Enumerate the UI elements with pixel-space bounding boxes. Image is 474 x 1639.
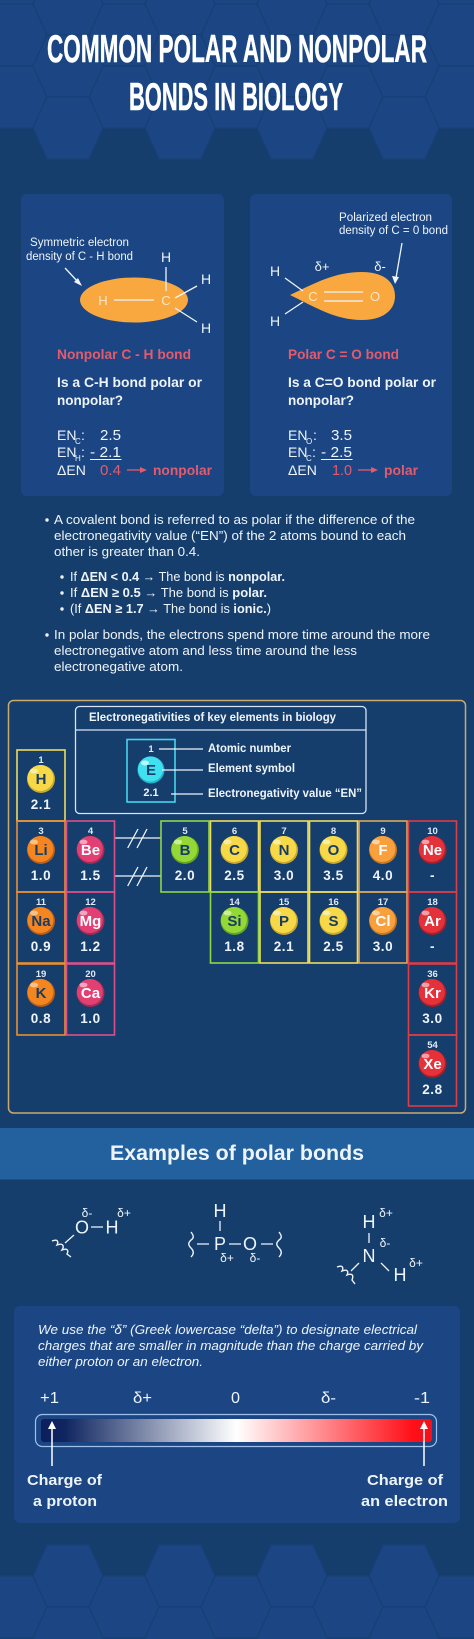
section banner: examples of polar bonds: Examples of polar bonds	[110, 1142, 364, 1165]
element: P: 2.1	[274, 939, 294, 954]
heading: nonpolar C-H bond: Nonpolar C - H bond	[57, 346, 191, 362]
molecule: N-H bonds: δ+	[379, 1206, 393, 1220]
element: Cl: 17	[378, 897, 388, 908]
element: Be	[66, 821, 114, 892]
element: P: P	[279, 913, 289, 930]
label: charge of an electron: Charge of	[367, 1472, 444, 1489]
legend: how to read an element cell: Electronegativities of key elements in biology	[89, 712, 337, 724]
calculation: C=O electronegativity: O	[306, 437, 312, 446]
element: Ne: Ne	[423, 842, 442, 859]
element: Li: 3	[38, 826, 44, 837]
element: Xe: 2.8	[422, 1082, 443, 1097]
molecule: O-H bond: δ+	[117, 1206, 131, 1220]
element: F: 4.0	[373, 868, 393, 883]
text block: polarity rules: electronegative atom.	[54, 659, 183, 674]
element: Li	[17, 821, 65, 892]
element: N: 3.0	[274, 868, 294, 883]
diagram: C=O polarized orbital	[270, 259, 395, 329]
element: Cl: 3.0	[373, 939, 393, 954]
element: Ne: 10	[427, 826, 438, 837]
heading: polar C=O bond: Polar C = O bond	[288, 346, 399, 362]
text block: delta definition: charges that are smaller in magnitude than the charge carried by	[38, 1339, 424, 1353]
molecule: N-H bonds: H	[362, 1212, 376, 1232]
molecule: O-H bond	[52, 1206, 131, 1257]
title	[47, 28, 427, 119]
element: K: K	[36, 985, 47, 1002]
element: Mg: 12	[85, 897, 96, 908]
element: Kr: 3.0	[422, 1011, 443, 1026]
diagram: C=O polarized orbital: O	[370, 289, 380, 304]
callout: polarized electron density: density of C = 0 bond	[339, 225, 448, 237]
molecule: P-O bond: δ-	[250, 1251, 260, 1265]
text block: delta definition: either proton or an electron.	[38, 1355, 203, 1369]
element: Mg: Mg	[80, 913, 101, 930]
diagram: C=O polarized orbital: C	[308, 289, 318, 304]
element: Be: 1.5	[80, 868, 101, 883]
diagram: C=O polarized orbital: H	[270, 313, 280, 329]
element: O: 3.5	[323, 868, 344, 883]
diagram: C=O polarized orbital: H	[270, 263, 280, 279]
calculation: C=O electronegativity: :	[312, 444, 316, 460]
calculation: C-H electronegativity: C	[75, 437, 81, 446]
element: Na: Na	[31, 913, 51, 930]
text block: delta definition	[38, 1323, 424, 1369]
calculation: C-H electronegativity: EN	[57, 444, 76, 460]
element: Na: 0.9	[31, 939, 51, 954]
element: Ar	[408, 892, 456, 963]
callout: symmetric electron density: Symmetric electron	[30, 237, 129, 249]
element: Cl: Cl	[376, 913, 390, 930]
text block: polarity rules: In polar bonds, the electrons spend more time around the more	[54, 627, 430, 642]
element: C	[210, 821, 258, 892]
arrow: proton	[48, 1421, 56, 1466]
molecule: N-H bonds: δ+	[409, 1256, 423, 1270]
calculation: C-H electronegativity	[57, 427, 213, 479]
molecule: N-H bonds	[337, 1206, 423, 1285]
scale labels	[40, 1390, 430, 1407]
element: Be: 4	[88, 826, 94, 837]
footer hexagon pattern	[0, 1545, 474, 1639]
question: C-H bond	[57, 374, 203, 408]
panel: periodic table	[8, 700, 466, 1113]
label: charge of a proton: Charge of	[27, 1472, 103, 1489]
label: charge of an electron: an electron	[361, 1493, 448, 1510]
element: O: O	[328, 842, 340, 859]
calculation: C-H electronegativity: :	[81, 444, 85, 460]
element: Li: 1.0	[31, 868, 51, 883]
element: H: 1	[38, 755, 44, 766]
text block: polarity rules: A covalent bond is referred to as polar if the difference of the	[54, 512, 415, 527]
element: K: 0.8	[31, 1011, 51, 1026]
legend: how to read an element cell: Atomic number	[208, 743, 292, 755]
element: B: 2.0	[175, 868, 195, 883]
element: F: 9	[380, 826, 386, 837]
element: Ca: 1.0	[80, 1011, 101, 1026]
panel: polar C=O bond	[250, 194, 452, 496]
element: Li: Li	[34, 842, 48, 859]
text block: polarity rules: If ΔEN ≥ 0.5 → The bond is polar.	[70, 585, 267, 600]
molecule: P-O bond	[189, 1201, 281, 1265]
calculation: C-H electronegativity: - 2.1	[90, 444, 121, 461]
element: F	[359, 821, 407, 892]
molecule: N-H bonds: δ-	[380, 1236, 390, 1250]
element: Be: Be	[81, 842, 100, 859]
element: N: N	[279, 842, 289, 859]
callout: symmetric electron density	[26, 237, 133, 286]
text block: polarity rules: other is greater than 0.4.	[54, 544, 200, 559]
element: Ne: -	[430, 868, 435, 883]
element: Si	[210, 892, 258, 963]
molecule: O-H bond: δ-	[82, 1206, 92, 1220]
element: F: F	[378, 842, 388, 859]
legend: how to read an element cell: Element symbol	[208, 763, 295, 775]
callout: polarized electron density: Polarized electron	[339, 212, 432, 224]
calculation: C=O electronegativity: 3.5	[331, 427, 352, 444]
diagram: C-H symmetric orbital: H	[161, 249, 171, 265]
element: C: 2.5	[224, 868, 245, 883]
element: Ca: 20	[85, 969, 96, 980]
molecule: P-O bond: P	[214, 1234, 226, 1254]
element: Kr: 36	[427, 969, 438, 980]
element: Na: 11	[36, 897, 47, 908]
label: charge of a proton: a proton	[33, 1493, 97, 1510]
element: S: 16	[328, 897, 339, 908]
calculation: C=O electronegativity: - 2.5	[321, 444, 352, 461]
molecule: P-O bond: O	[243, 1234, 257, 1254]
diagram: C-H symmetric orbital: H	[201, 320, 211, 336]
question: C=O bond: Is a C=O bond polar or	[288, 374, 437, 390]
legend: how to read an element cell: 1	[148, 744, 154, 755]
calculation: C=O electronegativity: EN	[288, 444, 307, 460]
calculation: C-H electronegativity: EN	[57, 427, 76, 443]
gradient charge bar	[36, 1414, 436, 1446]
header hexagon pattern	[0, 0, 474, 159]
molecule: O-H bond: H	[106, 1218, 118, 1238]
calculation: C=O electronegativity	[288, 427, 419, 479]
diagram: C-H symmetric orbital: H	[201, 271, 211, 287]
callout: polarized electron density	[339, 212, 448, 284]
element: Mg	[66, 892, 114, 963]
text block: polarity rules: If ΔEN < 0.4 → The bond is nonpolar.	[70, 569, 285, 584]
calculation: C-H electronegativity: nonpolar	[153, 462, 213, 478]
panel: delta charge scale	[14, 1306, 460, 1523]
calculation: C-H electronegativity: 2.5	[100, 427, 121, 444]
section banner: examples of polar bonds	[0, 1128, 474, 1180]
element: Ar: -	[430, 939, 435, 954]
element: Xe: Xe	[423, 1056, 442, 1073]
label: charge of a proton	[27, 1472, 103, 1510]
element: Mg: 1.2	[80, 939, 101, 954]
legend: how to read an element cell: Electronegativity value “EN”	[208, 788, 362, 800]
diagram: C-H symmetric orbital	[80, 249, 211, 336]
molecule: O-H bond: O	[75, 1218, 89, 1238]
question: C=O bond: nonpolar?	[288, 392, 354, 408]
element: Ar: 18	[427, 897, 438, 908]
element: Si: Si	[227, 913, 242, 930]
calculation: C-H electronegativity: H	[75, 454, 81, 463]
element: O	[310, 821, 358, 892]
calculation: C=O electronegativity: polar	[384, 462, 419, 478]
question: C=O bond	[288, 374, 437, 408]
element: H: H	[36, 771, 46, 788]
calculation: C-H electronegativity: ΔEN	[57, 462, 86, 478]
element: O: 8	[331, 826, 336, 837]
element: H: 2.1	[31, 797, 51, 812]
element: Ca: Ca	[81, 985, 101, 1002]
molecule: N-H bonds: H	[394, 1265, 406, 1285]
label: charge of an electron	[361, 1472, 448, 1510]
question: C-H bond: nonpolar?	[57, 392, 123, 408]
element: Si: 1.8	[224, 939, 245, 954]
element: P: 15	[279, 897, 290, 908]
text block: polarity rules	[45, 512, 430, 674]
diagram: C=O polarized orbital: δ+	[315, 259, 329, 274]
element: Ne	[408, 821, 456, 892]
legend: how to read an element cell: 2.1	[143, 787, 159, 799]
arrow: electron	[420, 1421, 428, 1466]
scale labels: 0	[231, 1390, 240, 1407]
element: Kr	[408, 964, 456, 1035]
element: P	[260, 892, 308, 963]
legend: how to read an element cell	[76, 706, 366, 814]
element: Kr: Kr	[424, 985, 441, 1002]
element: K	[17, 964, 65, 1035]
calculation: C=O electronegativity: :	[313, 427, 317, 443]
element: B	[161, 821, 209, 892]
calculation: C=O electronegativity: EN	[288, 427, 307, 443]
text block: polarity rules: (If ΔEN ≥ 1.7 → The bond is ionic.)	[70, 601, 271, 616]
element: Cl	[359, 892, 407, 963]
element: Si: 14	[229, 897, 240, 908]
periodic table break marks	[115, 829, 161, 886]
scale labels: δ-	[321, 1390, 336, 1407]
calculation: C-H electronegativity: :	[81, 427, 85, 443]
legend: how to read an element cell: E	[146, 762, 156, 779]
element: Xe	[408, 1035, 456, 1106]
element: B: B	[180, 842, 191, 859]
calculation: C-H electronegativity: 0.4	[100, 462, 121, 479]
calculation: C=O electronegativity: ΔEN	[288, 462, 317, 478]
text block: polarity rules: electronegative atom and less time around the less	[54, 643, 358, 658]
element: C: C	[229, 842, 240, 859]
molecule: P-O bond: δ+	[220, 1251, 234, 1265]
element: Na	[17, 892, 65, 963]
element: H	[17, 750, 65, 821]
text block: delta definition: We use the “δ” (Greek lowercase “delta”) to designate electrical	[38, 1323, 418, 1337]
calculation: C=O electronegativity: 1.0	[332, 462, 352, 479]
question: C-H bond: Is a C-H bond polar or	[57, 374, 203, 390]
element: N: 7	[281, 826, 287, 837]
element: B: 5	[182, 826, 188, 837]
diagram: C-H symmetric orbital: C	[161, 293, 171, 308]
scale labels: +1	[40, 1390, 59, 1407]
panel: nonpolar C-H bond	[21, 194, 224, 496]
element: S: S	[328, 913, 339, 930]
scale labels: -1	[414, 1390, 430, 1407]
element: S: 2.5	[323, 939, 344, 954]
calculation: C=O electronegativity: C	[306, 454, 312, 463]
text block: polarity rules: electronegativity value (“EN”) of the 2 atoms bound to each	[54, 528, 406, 543]
element: S	[310, 892, 358, 963]
element: Xe: 54	[427, 1040, 438, 1051]
diagram: C=O polarized orbital: δ-	[374, 259, 386, 274]
scale labels: δ+	[133, 1390, 152, 1407]
element: N	[260, 821, 308, 892]
callout: symmetric electron density: density of C - H bond	[26, 251, 133, 263]
element: Ar: Ar	[424, 913, 441, 930]
molecule: P-O bond: H	[214, 1201, 226, 1221]
element: Ca	[66, 964, 114, 1035]
element: C: 6	[232, 826, 237, 837]
molecule: N-H bonds: N	[362, 1246, 376, 1266]
diagram: C-H symmetric orbital: H	[98, 293, 108, 308]
element: K: 19	[36, 969, 46, 980]
